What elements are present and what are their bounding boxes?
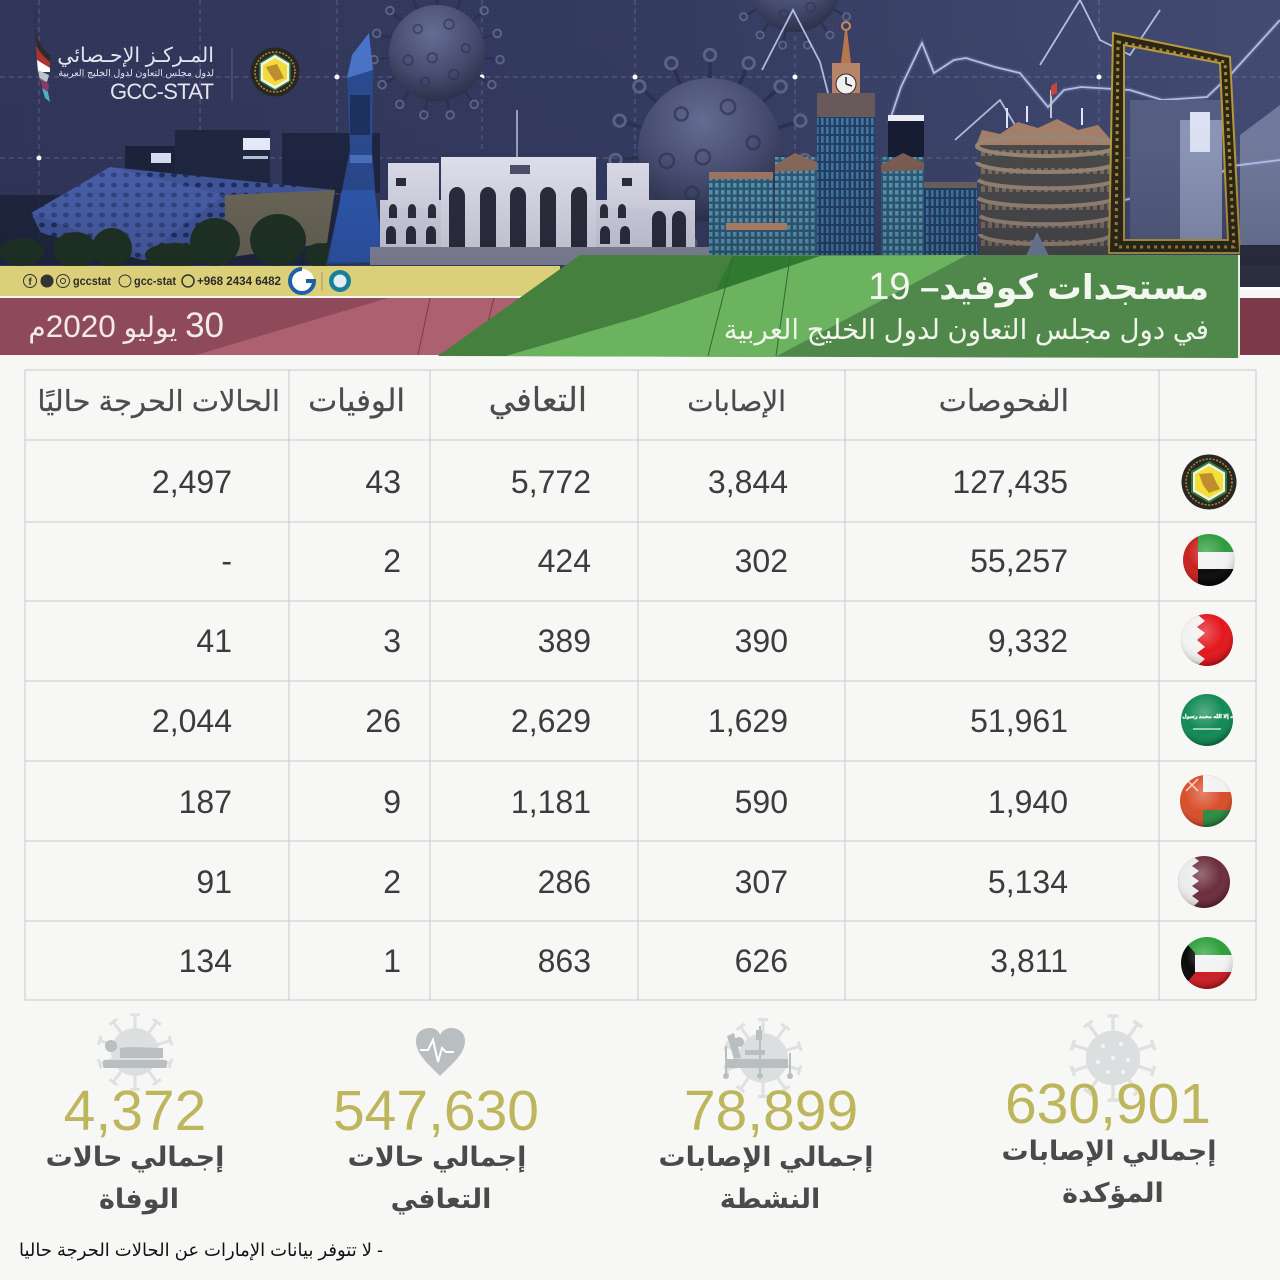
row: GCC total: 127,435 (952, 464, 1068, 500)
label: التعافي (391, 1184, 491, 1215)
logo: GCC emblem (250, 48, 300, 96)
row: Oman (179, 784, 1068, 820)
label: النشطة (720, 1184, 820, 1214)
row: Bahrain: 3 (383, 623, 401, 659)
label: إجمالي الإصابات (1002, 1136, 1216, 1167)
row: Saudi Arabia (152, 703, 1068, 739)
stat: total active cases (659, 1020, 873, 1214)
phone: +968 2434 6482 (197, 274, 281, 288)
icon: GCC emblem (1182, 454, 1236, 510)
virus: large (609, 49, 811, 250)
certification logo 2 (329, 270, 351, 292)
building: Doha torch tower (326, 33, 386, 265)
background dark buildings (0, 100, 1222, 265)
row: Oman: 1,940 (988, 784, 1068, 820)
date text: 30 يوليو 2020م (28, 306, 224, 345)
virus: top right (739, 0, 851, 50)
row: Bahrain: 9,332 (988, 623, 1068, 659)
table header: الحالات الحرجة حاليًا (37, 386, 280, 418)
icon: Qatar flag (1178, 856, 1230, 908)
row: Kuwait: 1 (383, 943, 401, 979)
icon: Saudi flag (1181, 694, 1233, 746)
row: GCC total: 3,844 (708, 464, 788, 500)
building: round tower (975, 82, 1118, 258)
row: Bahrain: 389 (538, 623, 591, 659)
row: Kuwait: 3,811 (990, 943, 1068, 979)
row: Saudi Arabia: 51,961 (970, 703, 1068, 739)
date band (0, 298, 1280, 355)
row: Kuwait: 863 (538, 943, 591, 979)
row: GCC total: 2,497 (152, 464, 232, 500)
label: المؤكدة (1062, 1178, 1164, 1209)
right edge ground (1240, 245, 1280, 287)
row: Bahrain: 41 (196, 623, 232, 659)
label: إجمالي حالات (348, 1142, 526, 1173)
icon: virus (1071, 1016, 1155, 1100)
icon: heart with pulse (416, 1028, 465, 1076)
table header: الإصابات (687, 386, 786, 418)
table header: الفحوصات (939, 385, 1069, 418)
handle gccstat: gccstat (73, 274, 111, 288)
table (25, 370, 1256, 1000)
number: 4,372 (64, 1079, 206, 1143)
number: 547,630 (333, 1079, 539, 1143)
icon: UAE flag (1183, 534, 1235, 586)
row: Kuwait (179, 943, 1068, 979)
logo Arabic name: المـركـز الإحـصائي (57, 44, 214, 67)
icon: Saudi flag: لا إله إلا الله محمد رسول الله (1172, 714, 1242, 720)
row: Saudi Arabia: 2,629 (511, 703, 591, 739)
label: إجمالي حالات (46, 1142, 224, 1173)
row: Oman: 590 (735, 784, 788, 820)
icon: Oman flag (1180, 775, 1232, 827)
footnote: - لا تتوفر بيانات الإمارات عن الحالات الحرجة حاليا (19, 1240, 383, 1261)
icon: Kuwait flag (1181, 937, 1233, 989)
row: GCC total: 43 (365, 464, 401, 500)
label (659, 1142, 873, 1214)
table grid (25, 370, 1256, 1000)
building: Makkah clock tower group (709, 22, 977, 258)
virus: upper middle (370, 0, 504, 120)
row: Qatar: 5,134 (988, 864, 1068, 900)
row: Saudi Arabia: 1,629 (708, 703, 788, 739)
banner image: city skyline and viruses (0, 0, 1280, 290)
icon: Bahrain flag (1181, 614, 1233, 666)
row: Qatar: 2 (383, 864, 401, 900)
row: Qatar: 307 (735, 864, 788, 900)
row: Bahrain: 390 (735, 623, 788, 659)
logo: GCC-STAT (35, 8, 214, 104)
label (46, 1142, 224, 1215)
logo Arabic subtitle: لدول مجلس التعاون لدول الخليج العربية (58, 68, 214, 79)
row: Saudi Arabia: 2,044 (152, 703, 232, 739)
social icons (24, 274, 70, 288)
logo GCC-STAT text: GCC-STAT (110, 79, 214, 104)
logo ribbon (35, 8, 50, 102)
icon: virus and patient (98, 1015, 172, 1089)
label (348, 1142, 526, 1215)
social icons: f (28, 277, 32, 288)
row: UAE: 55,257 (970, 543, 1068, 579)
row: Oman: 1,181 (511, 784, 591, 820)
number: 78,899 (684, 1079, 858, 1143)
row: GCC total: 5,772 (511, 464, 591, 500)
table header: الوفيات (308, 383, 405, 419)
trees (0, 214, 335, 268)
row: Saudi Arabia: 26 (365, 703, 401, 739)
row: Kuwait: 134 (179, 943, 232, 979)
row: Qatar: 91 (196, 864, 232, 900)
label: الوفاة (99, 1184, 179, 1215)
row: GCC total (152, 464, 1068, 500)
row: UAE: - (221, 543, 232, 579)
title: مستجدات كوفيد– 19 (868, 266, 1209, 308)
row: Kuwait: 626 (735, 943, 788, 979)
building: Kuwait cultural centre (31, 167, 335, 260)
row: Bahrain (196, 623, 1068, 659)
row: UAE: 302 (735, 543, 788, 579)
label: إجمالي الإصابات (659, 1142, 873, 1173)
row: Oman: 9 (383, 784, 401, 820)
icon: virus and hospital bed (723, 1020, 801, 1096)
row: Qatar: 286 (538, 864, 591, 900)
row: Qatar (196, 864, 1068, 900)
chart lines (762, 0, 1280, 200)
table header: التعافي (489, 381, 587, 419)
stat: total deaths (46, 1015, 224, 1215)
number: 630,901 (1005, 1072, 1211, 1136)
stat: total recoveries (333, 1028, 539, 1215)
contact strip (0, 266, 560, 296)
certification logo 1 (290, 269, 314, 293)
row: UAE (221, 543, 1068, 579)
title panel (438, 255, 1240, 358)
row: UAE: 424 (538, 543, 591, 579)
label (1002, 1136, 1216, 1209)
building: Dubai frame (1109, 33, 1240, 253)
building: royal opera house Muscat (370, 110, 710, 265)
lighter right background (1240, 105, 1280, 245)
handle gcc-stat (119, 274, 176, 288)
handle gcc-stat: gcc-stat (134, 274, 176, 288)
row: UAE: 2 (383, 543, 401, 579)
table header (37, 381, 1069, 419)
stat: total confirmed cases (1002, 1016, 1216, 1209)
row: Oman: 187 (179, 784, 232, 820)
subtitle: في دول مجلس التعاون لدول الخليج العربية (724, 314, 1209, 346)
